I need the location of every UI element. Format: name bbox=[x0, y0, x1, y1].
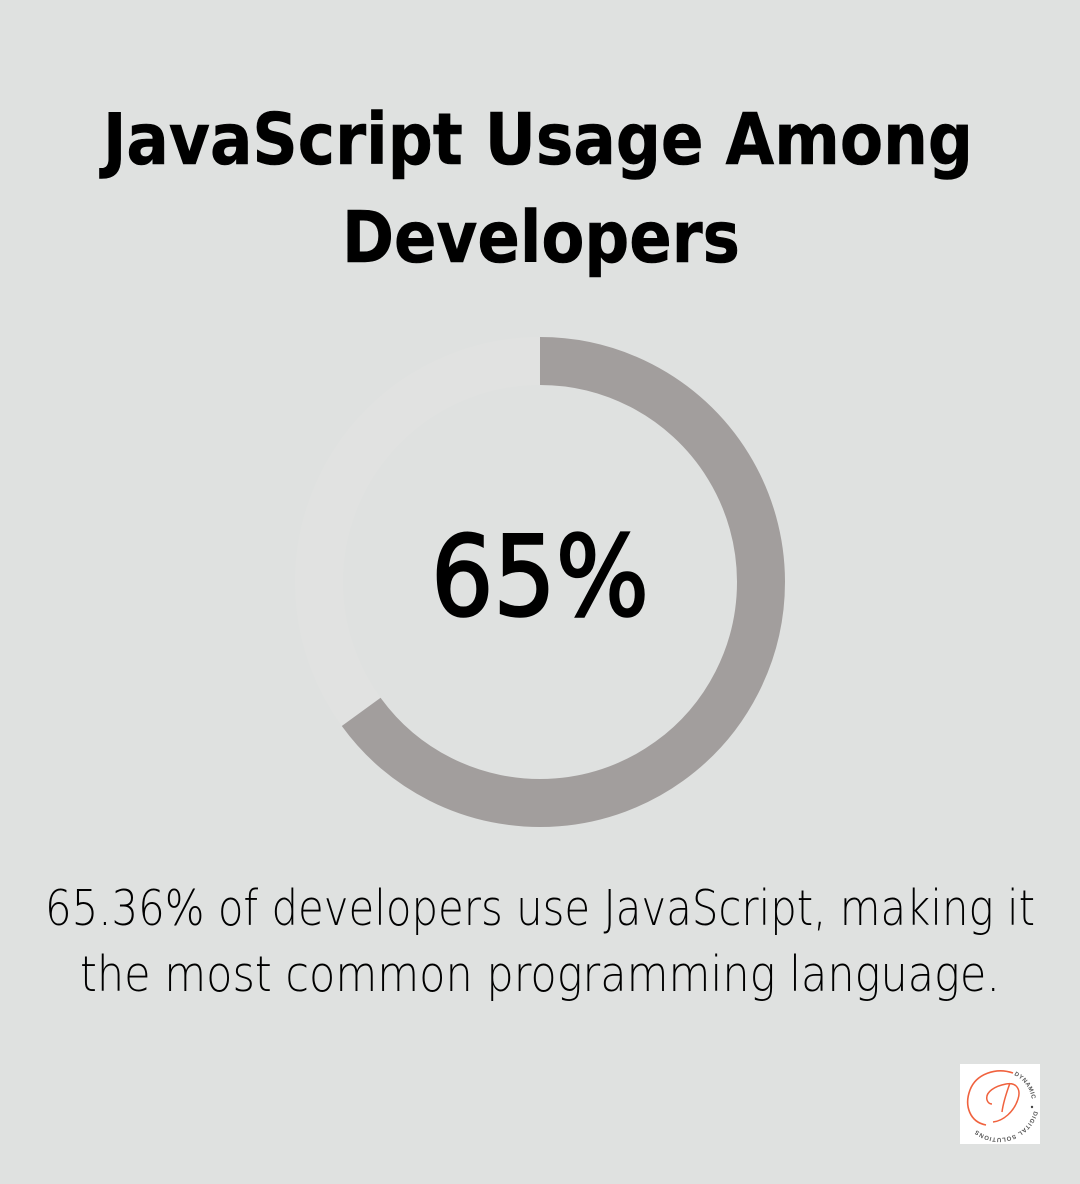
title: Developers bbox=[342, 196, 740, 279]
donut track bbox=[319, 361, 761, 803]
title: JavaScript Usage Among bbox=[99, 98, 973, 181]
title bbox=[99, 98, 973, 279]
logo ring text: DIGITAL SOLUTIONS bbox=[974, 1111, 1038, 1142]
logo ring text bbox=[974, 1072, 1038, 1142]
logo: Dynamic Digital Solutions bbox=[960, 1064, 1040, 1144]
logo circle swoosh bbox=[968, 1071, 1013, 1125]
logo ring text: DYNAMIC bbox=[1014, 1072, 1036, 1099]
logo background bbox=[960, 1064, 1040, 1144]
donut value arc bbox=[361, 361, 761, 803]
donut chart: 65% bbox=[319, 361, 761, 803]
logo letter D bbox=[987, 1083, 1019, 1122]
donut value label: 65% bbox=[431, 513, 649, 642]
description text bbox=[45, 880, 1035, 1003]
